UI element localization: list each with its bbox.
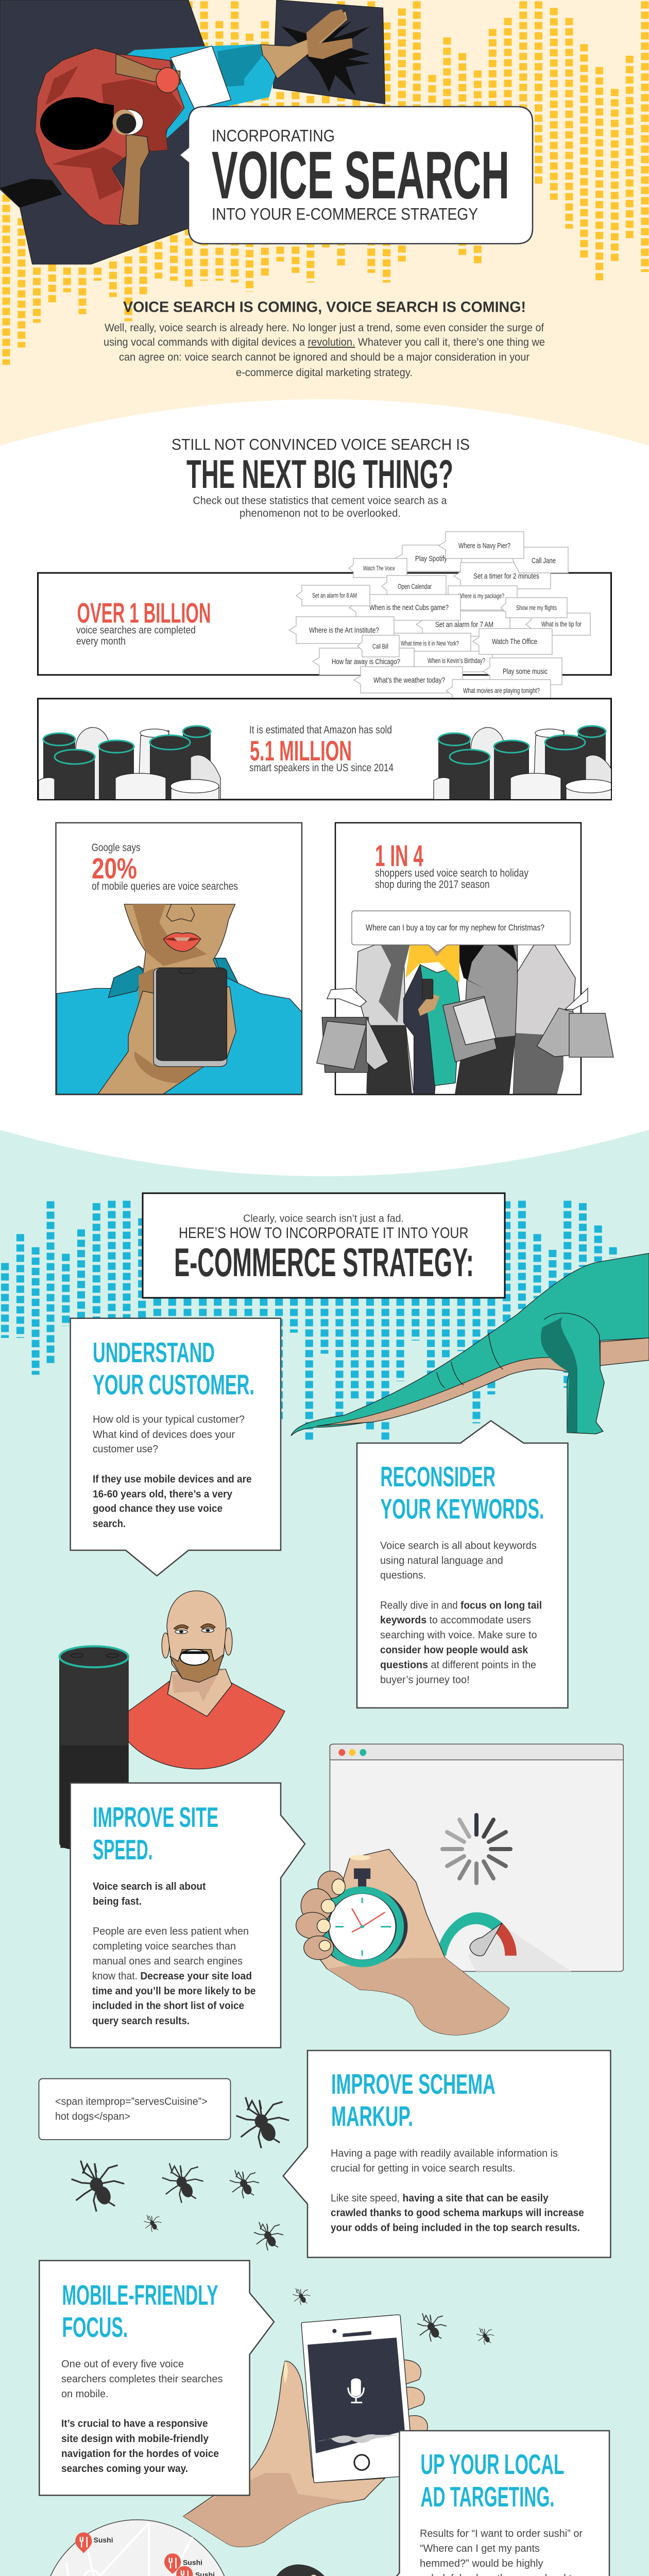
map labels [77, 2536, 231, 2576]
map labels: Sushi [183, 2558, 202, 2567]
voice query speech bubble cloud: Watch The Voice [363, 565, 395, 572]
code snippet box [39, 2079, 231, 2140]
body text: manual ones and search engines [93, 1956, 243, 1967]
body text: Having a page with readily available information is [331, 2148, 558, 2159]
heading: IMPROVE SCHEMA [331, 2068, 496, 2100]
body text: know that. Decrease your site load [92, 1971, 252, 1982]
voice query speech bubble cloud: Where is my package? [458, 592, 504, 600]
body text: good chance they use voice [93, 1503, 223, 1515]
illustration: woman on sofa using smart speaker [0, 0, 385, 264]
body text: time and you’ll be more likely to be [92, 1986, 255, 1997]
intro paragraph: can agree on: voice search cannot be ignored and should be a major consideration in your [119, 351, 530, 363]
mint strategy background [0, 1130, 649, 2576]
voice query speech bubble cloud: What’s the weather today? [373, 676, 445, 685]
heading: UNDERSTAND [93, 1336, 215, 1368]
speech bubble: toy car question: Where can I buy a toy car for my nephew for Christmas? [366, 923, 544, 933]
body text: If they use mobile devices and are [93, 1473, 252, 1485]
body text: Results for “I want to order sushi” or [420, 2528, 583, 2539]
body text [331, 2148, 584, 2234]
panel: up your local ad targeting [374, 2431, 609, 2576]
body text [380, 1540, 542, 1686]
map labels: Sushi [94, 2536, 113, 2544]
intro paragraph [104, 322, 545, 379]
panel: improve schema markup [283, 2050, 610, 2258]
title line 3: INTO YOUR E-COMMERCE STRATEGY [212, 205, 478, 224]
heading [93, 1336, 254, 1401]
body text: consider how people would ask [380, 1645, 528, 1656]
title speech bubble [179, 107, 533, 244]
body text: search. [93, 1518, 126, 1530]
body text: Like site speed, having a site that can be easily [331, 2193, 549, 2204]
smart speakers right [434, 726, 616, 804]
fingers [296, 1871, 345, 1960]
voice query speech bubble cloud: Call Bill [372, 642, 388, 650]
voice query speech bubble cloud: Set an alarm for 7 AM [435, 620, 493, 629]
illustration: browser window loading [330, 1744, 623, 1972]
voice query speech bubble cloud: What movies are playing tonight? [463, 686, 540, 694]
body text: How old is your typical customer? [93, 1414, 245, 1426]
body text: customer use? [93, 1444, 158, 1455]
stat text [375, 839, 528, 890]
voice query speech bubble cloud: What is the tip for [541, 620, 582, 628]
body text [420, 2528, 583, 2576]
body text: completing voice searches than [93, 1941, 236, 1952]
body text: What kind of devices does your [93, 1429, 235, 1440]
body text: People are even less patient when [93, 1926, 249, 1937]
body text: One out of every five voice [61, 2359, 184, 2370]
heading [62, 2279, 218, 2343]
body text: searching with voice. Make sure to [380, 1630, 537, 1641]
speed gauge [437, 1912, 571, 1972]
body text [61, 2359, 223, 2475]
illustration: smart speaker and smiling man [60, 1591, 285, 1849]
voice query speech bubble cloud: Set an alarm for 8 AM [312, 591, 357, 599]
strategy heading box [143, 1193, 505, 1298]
body text [93, 1414, 252, 1530]
heading [420, 2448, 565, 2513]
body text: Really dive in and focus on long tail [380, 1600, 542, 1611]
panel: 1 in 4 shoppers [317, 823, 613, 1094]
panel: improve site speed [71, 1783, 305, 2047]
heading: AD TARGETING. [420, 2481, 554, 2513]
stat caption: every month [76, 636, 126, 647]
illustration: man in chicago bulls hat [141, 2565, 421, 2576]
voice query speech bubble cloud [289, 532, 590, 702]
title line 1: INCORPORATING [212, 127, 335, 145]
voice query speech bubble cloud: When is the next Cubs game? [369, 603, 449, 612]
panel: mobile-friendly focus [39, 2261, 274, 2495]
intro paragraph: using vocal commands with digital devices a revolution. Whatever you call it, there’s one thing we [104, 336, 545, 348]
cream background [0, 0, 649, 464]
heading: FOCUS. [62, 2311, 128, 2343]
heading: YOUR KEYWORDS. [380, 1493, 544, 1524]
loading spinner [442, 1815, 510, 1883]
body text: hemmed?” would be highly [420, 2558, 543, 2569]
code snippet box: <span itemprop=”servesCuisine”> [55, 2096, 208, 2108]
panel: reconsider your keywords [357, 1421, 568, 1708]
voice query speech bubble cloud: How far away is Chicago? [332, 657, 400, 666]
stat text: Google says [92, 842, 141, 854]
voice query speech bubble cloud: Call Jane [532, 556, 556, 565]
map: sushi results in Washington DC [41, 2520, 233, 2576]
microphone icon [348, 2378, 364, 2402]
stat caption: voice searches are completed [76, 624, 196, 636]
body text: 16-60 years old, there’s a very [93, 1489, 233, 1500]
body text: keywords to accommodate users [380, 1615, 531, 1626]
body text: your odds of being included in the top search results. [331, 2223, 580, 2234]
heading: MOBILE-FRIENDLY [62, 2279, 218, 2311]
statistics heading: phenomenon not to be overlooked. [240, 507, 401, 519]
body text: It’s crucial to have a responsive [61, 2418, 208, 2430]
voice query speech bubble cloud: Play Spotify [415, 554, 447, 563]
stat: over 1 billion: OVER 1 BILLION [77, 597, 211, 629]
blue equalizer bars [5, 1201, 613, 1442]
voice query speech bubble cloud: Play some music [503, 667, 548, 676]
statistics heading: STILL NOT CONVINCED VOICE SEARCH IS [172, 435, 470, 453]
panel: 20 percent of mobile queries [56, 823, 302, 1094]
heading: SPEED. [93, 1834, 152, 1866]
stat text: shop during the 2017 season [375, 879, 490, 890]
stat text: shoppers used voice search to holiday [375, 868, 528, 879]
stat text: smart speakers in the US since 2014 [249, 762, 394, 774]
heading: UP YOUR LOCAL [420, 2448, 565, 2480]
body text: Voice search is all about keywords [380, 1540, 537, 1552]
voice query speech bubble cloud: What time is it in New York? [401, 639, 459, 647]
panel: understand your customer [71, 1318, 281, 1576]
intro paragraph: e-commerce digital marketing strategy. [236, 367, 413, 379]
body text: navigation for the hordes of voice [61, 2448, 219, 2460]
heading [93, 1801, 218, 1866]
stat text: 1 IN 4 [375, 839, 423, 873]
voice query speech bubble cloud: When is Kevin’s Birthday? [428, 656, 485, 665]
voice query speech bubble cloud: Where is Navy Pier? [458, 541, 510, 550]
body text: crucial for getting in voice search results. [331, 2163, 515, 2174]
body text: questions. [380, 1570, 426, 1581]
code snippet box: hot dogs</span> [55, 2111, 130, 2122]
body text [92, 1881, 255, 2027]
body text: query search results. [92, 2015, 190, 2027]
heading [380, 1461, 544, 1524]
body text: being fast. [93, 1896, 142, 1907]
body text: searchers completes their searches [61, 2374, 223, 2385]
intro heading: VOICE SEARCH IS COMING, VOICE SEARCH IS COMING! [123, 299, 526, 316]
stat text: of mobile queries are voice searches [92, 880, 238, 892]
stat text: 5.1 MILLION [250, 735, 352, 767]
body text: site design with mobile-friendly [61, 2433, 209, 2445]
body text: questions at different points in the [380, 1659, 536, 1671]
illustration: woman speaking into phone [57, 904, 302, 1094]
smart speaker [60, 1646, 128, 1849]
panel: 5.1 million smart speakers [38, 699, 616, 804]
stat caption [76, 624, 196, 647]
smart speakers left [39, 726, 220, 804]
stopwatch [317, 1869, 408, 1966]
illustration: dinosaur [291, 1253, 649, 1436]
statistics heading [172, 435, 470, 519]
voice query speech bubble cloud: Where is the Art Institute? [309, 626, 379, 635]
white statistics background [0, 399, 649, 1133]
body text: Voice search is all about [93, 1881, 206, 1892]
body text: using natural language and [380, 1555, 503, 1567]
illustration: hand holding stopwatch with speed gauge [296, 1849, 571, 2035]
statistics heading: Check out these statistics that cement voice search as a [193, 495, 447, 507]
voice query speech bubble cloud: Show me my flights [516, 604, 557, 612]
body text: “Where can I get my pants [420, 2543, 540, 2554]
body text: on mobile. [61, 2388, 109, 2400]
stat text [92, 842, 238, 892]
heading: YOUR CUSTOMER. [93, 1369, 254, 1401]
voice query speech bubble cloud: Set a timer for 2 minutes [473, 572, 539, 581]
heading: MARKUP. [331, 2100, 413, 2132]
strategy heading box: HERE’S HOW TO INCORPORATE IT INTO YOUR [179, 1225, 469, 1242]
body text: buyer’s journey too! [380, 1674, 470, 1686]
body text: searches coming your way. [61, 2463, 188, 2475]
body text: included in the short list of voice [92, 2000, 244, 2011]
illustration: hand holding phone [183, 2315, 428, 2547]
strategy heading box: Clearly, voice search isn’t just a fad. [243, 1213, 404, 1224]
statistics heading: THE NEXT BIG THING? [186, 451, 453, 497]
speech bubble: toy car question [352, 911, 570, 952]
panel: over 1 billion [38, 573, 611, 675]
icons: crawling spiders [72, 2097, 494, 2345]
stat text: It is estimated that Amazon has sold [249, 724, 392, 736]
voice query speech bubble cloud: Watch The Office [492, 637, 537, 646]
intro paragraph: Well, really, voice search is already here. No longer just a trend, some even consider the surge of [105, 322, 544, 334]
yellow equalizer bars [6, 2, 645, 365]
heading: IMPROVE SITE [93, 1801, 218, 1833]
stat text [249, 724, 394, 774]
body text: crawled thanks to good schema markups will increase [331, 2207, 584, 2218]
heading: RECONSIDER [380, 1461, 496, 1493]
voice query speech bubble cloud: Open Calendar [398, 582, 432, 590]
stat text: 20% [92, 852, 137, 885]
smiling man [128, 1591, 285, 1769]
illustration: group of holiday shoppers [317, 945, 613, 1093]
heading [331, 2068, 496, 2132]
